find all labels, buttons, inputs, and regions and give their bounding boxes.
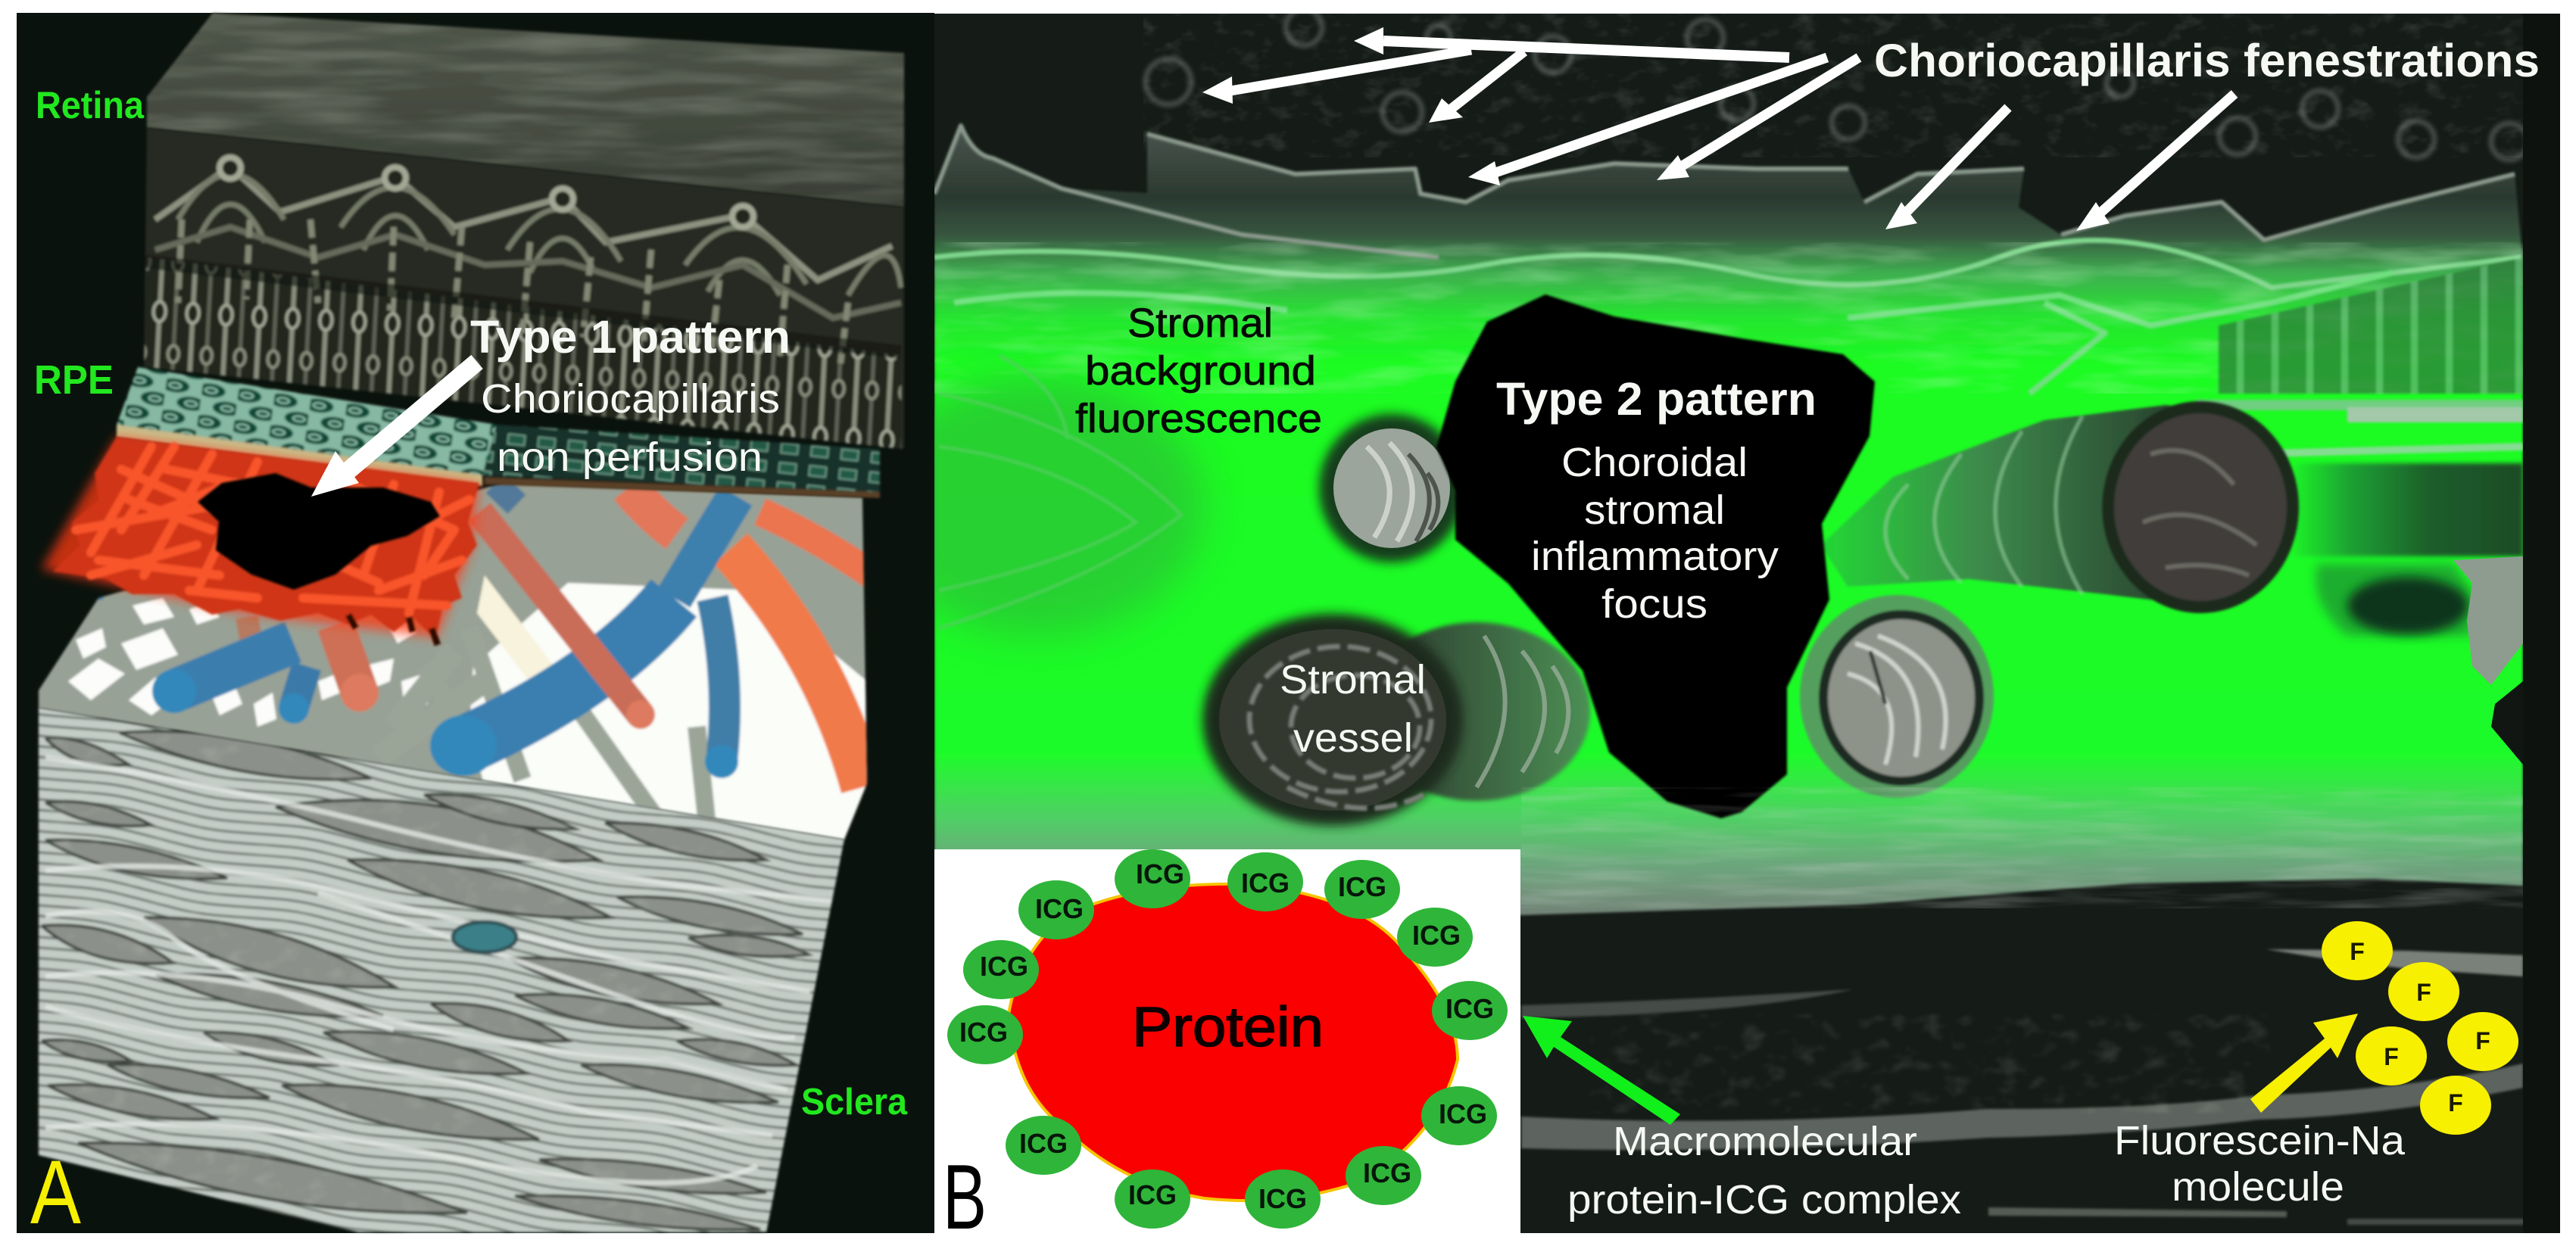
fluorescein molecules <box>2322 921 2518 1135</box>
callout: Type 2 pattern <box>1496 373 1817 627</box>
ICG labels <box>959 858 1494 1214</box>
ICG labels: ICG <box>1445 993 1494 1024</box>
label: Stromal vessel: vessel <box>1293 715 1413 761</box>
membrane highlights <box>934 126 2521 394</box>
inset: protein-ICG complex diagram <box>934 849 1520 1248</box>
retina top slab <box>144 13 909 210</box>
ICG labels: ICG <box>1241 867 1290 899</box>
stromal vessel with tail <box>1202 614 1590 826</box>
label: RPE: RPE <box>34 357 114 403</box>
callout: Type 1 pattern: Type 1 pattern <box>470 311 791 363</box>
choriocapillaris network, red <box>42 437 479 645</box>
ICG labels: ICG <box>1136 858 1184 889</box>
type 2 choroidal inflammatory focus, black <box>1436 294 1875 818</box>
RPE cell layer <box>117 367 880 498</box>
label: Stromal background fluorescence: fluorescence <box>1075 396 1322 441</box>
fluorescein molecules: F <box>2350 938 2365 965</box>
choroidal stroma green fluorescence band <box>934 126 2523 915</box>
label: Fluorescein-Na molecule <box>2114 1118 2406 1210</box>
ICG labels: ICG <box>1412 920 1461 951</box>
fluorescein molecules: F <box>2416 979 2431 1006</box>
fluorescein molecules: F <box>2475 1027 2490 1054</box>
label: Macromolecular protein-ICG complex <box>1567 1119 1961 1223</box>
vessels: blue veins <box>56 484 736 762</box>
callout: Type 1 pattern: Choriocapillaris <box>481 376 780 422</box>
green arrow to protein complex <box>1523 1016 1680 1125</box>
label: Stromal background fluorescence <box>1075 301 1322 441</box>
protein label: Protein <box>1132 995 1324 1058</box>
callout: Type 2 pattern: focus <box>1601 581 1707 627</box>
ICG molecules <box>947 849 1508 1229</box>
panel letter B: B <box>943 1145 987 1248</box>
ICG labels: ICG <box>1258 1183 1307 1214</box>
ICG labels: ICG <box>1128 1179 1177 1210</box>
callout: Type 1 pattern <box>470 311 791 480</box>
ICG labels: ICG <box>1338 871 1386 902</box>
callout: Type 1 pattern: non perfusion <box>497 435 763 480</box>
choriocapillaris fenestration rings <box>1146 9 2528 160</box>
panel B: choroidal cross-section <box>871 9 2560 1248</box>
callout: Type 2 pattern: Choroidal <box>1561 440 1748 485</box>
label: Stromal vessel <box>1280 657 1426 761</box>
label: Fluorescein-Na molecule: Fluorescein-Na <box>2114 1118 2406 1163</box>
fluorescein molecules: F <box>2384 1043 2399 1070</box>
lower gray bands of the sclera <box>1521 949 2560 1225</box>
panel letter A: A <box>30 1142 81 1243</box>
top right stromal vessel <box>1821 405 2293 607</box>
small vessel in sclera <box>453 922 516 952</box>
ICG labels: ICG <box>1035 893 1084 924</box>
retinal cell layers <box>144 128 904 449</box>
sclera collagen block <box>39 708 844 1232</box>
yellow arrow to fluorescein molecules <box>2250 1014 2358 1113</box>
lower right cross-sectioned vessel <box>1800 595 1994 798</box>
label: Fluorescein-Na molecule: molecule <box>2172 1164 2344 1210</box>
ICG labels: ICG <box>1363 1157 1411 1188</box>
lower gray streaks of the sclera edge <box>1521 787 2523 908</box>
black non-perfusion area <box>198 473 440 590</box>
callout: Type 2 pattern: stromal <box>1584 487 1725 533</box>
ICG labels: ICG <box>1019 1128 1068 1159</box>
white arrows: choriocapillaris fenestrations <box>1202 27 2235 231</box>
right dark tube and gray remnant <box>2294 463 2523 765</box>
label: Sclera: Sclera <box>801 1082 908 1123</box>
label: Stromal vessel: Stromal <box>1280 657 1426 702</box>
left cross-sectioned vessel <box>1319 414 1464 562</box>
front arteries <box>479 512 641 715</box>
label: Retina: Retina <box>36 84 145 126</box>
panel A: 3D cube of retina, choroid and sclera <box>17 13 934 1243</box>
protein body <box>1009 884 1458 1201</box>
callout: Type 2 pattern: inflammatory <box>1531 534 1779 579</box>
vessels: orange arteries <box>247 487 878 787</box>
label: Stromal background fluorescence: background <box>1085 348 1316 394</box>
callout: Type 2 pattern: Type 2 pattern <box>1496 373 1817 425</box>
fluorescein molecules: F <box>2448 1089 2463 1117</box>
ICG labels: ICG <box>1439 1098 1487 1129</box>
darker stromal wisps, left <box>871 356 1204 636</box>
white arrow: type 1 <box>311 362 477 497</box>
stripes of the right edge <box>2196 257 2523 454</box>
choroid background with vessels <box>39 483 878 844</box>
ICG labels: ICG <box>980 951 1028 982</box>
ICG labels: ICG <box>959 1017 1008 1048</box>
label: Macromolecular protein-ICG complex: Macromolecular <box>1613 1119 1917 1164</box>
heading: Choriocapillaris fenestrations: Choriocapillaris fenestrations <box>1874 35 2540 86</box>
label: Macromolecular protein-ICG complex: protein-ICG complex <box>1567 1177 1961 1223</box>
label: Stromal background fluorescence: Stromal <box>1127 301 1273 346</box>
